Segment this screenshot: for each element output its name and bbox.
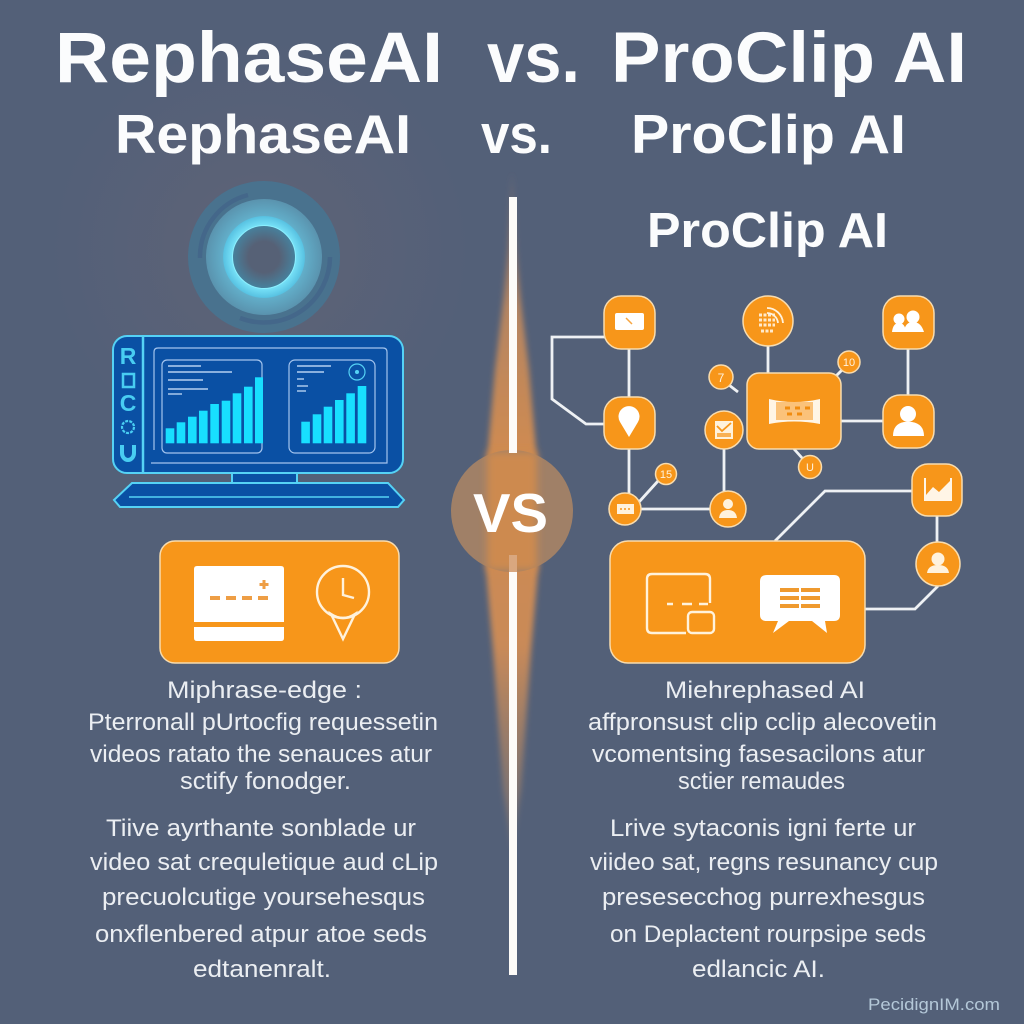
node: small tag: U	[806, 462, 814, 474]
connector lines	[552, 337, 938, 609]
node: small magnifier	[709, 365, 733, 389]
node: image chart	[912, 464, 962, 516]
node: chart frame	[705, 411, 743, 449]
central divider with VS badge: VS	[473, 482, 548, 544]
text block: ProClip AI intro: sctier remaudes	[678, 768, 845, 795]
node: small label	[656, 464, 676, 484]
diagram: ProClip AI node network	[552, 296, 962, 663]
node: user right	[883, 395, 934, 448]
subtitle: second heading row: ProClip AI	[631, 103, 906, 165]
text block: ProClip AI details: viideo sat, regns resunancy cup	[590, 849, 938, 876]
title: main heading row: vs.	[487, 19, 580, 98]
text block: RephaseAI details: edtanenralt.	[193, 956, 331, 983]
node: group	[883, 296, 934, 349]
title: main heading row: ProClip AI	[611, 19, 967, 98]
node: calendar signal	[743, 296, 793, 346]
node: user bottom	[916, 542, 960, 586]
icon: monitor with dashboards	[113, 336, 404, 507]
icon: chat bubble	[760, 575, 840, 633]
central divider with VS badge	[451, 172, 573, 975]
subtitle: second heading row	[115, 103, 906, 165]
text block: ProClip AI intro: affpronsust clip cclip alecovetin	[588, 709, 937, 736]
node: screen	[604, 296, 655, 349]
text block: RephaseAI intro: Pterronall pUrtocfig requessetin	[88, 709, 438, 736]
node: small magnifier: 7	[718, 371, 725, 385]
text block: RephaseAI intro: videos ratato the senauces atur	[90, 741, 432, 768]
node: small label: 15	[660, 469, 672, 481]
node: user lower	[710, 491, 746, 527]
text block: RephaseAI intro	[88, 677, 438, 795]
node: central film box	[747, 373, 841, 449]
text block: ProClip AI details	[590, 815, 938, 983]
icon: clock pin	[317, 566, 369, 639]
text block: ProClip AI details: presesecchog purrexhesgus	[602, 884, 925, 911]
node: small number	[838, 351, 860, 373]
text block: ProClip AI details: on Deplactent rourpsipe seds	[610, 921, 926, 948]
right chart panel	[289, 360, 375, 453]
node: ticket	[609, 493, 641, 525]
monitor sidebar letters	[120, 343, 137, 460]
text block: RephaseAI details: onxflenbered atpur atoe seds	[95, 921, 427, 948]
heading: ProClip AI column: ProClip AI	[647, 204, 888, 258]
panel: RephaseAI orange card	[160, 541, 399, 663]
text block: ProClip AI intro: vcomentsing fasesacilons atur	[592, 741, 925, 768]
text block: ProClip AI intro: Miehrephased AI	[665, 677, 865, 704]
text block: RephaseAI details: precuolcutige yoursehesqus	[102, 884, 425, 911]
icon: window frames	[647, 574, 714, 633]
text block: RephaseAI details: Tiive ayrthante sonblade ur	[106, 815, 416, 842]
text block: RephaseAI intro: Miphrase-edge :	[167, 677, 362, 704]
text block: RephaseAI details: video sat crequletique aud cLip	[90, 849, 438, 876]
subtitle: second heading row: RephaseAI	[115, 103, 411, 165]
panel: ProClip AI orange card	[610, 541, 865, 663]
icon: card	[194, 566, 284, 641]
text block: ProClip AI details: Lrive sytaconis igni ferte ur	[610, 815, 916, 842]
node: small number: 10	[843, 357, 855, 369]
text block: RephaseAI intro: sctify fonodger.	[180, 768, 351, 795]
node: small tag	[798, 456, 822, 478]
monitor sidebar letters: C	[120, 390, 136, 416]
subtitle: second heading row: vs.	[481, 103, 552, 165]
title: main heading row: RephaseAI	[55, 19, 443, 98]
text block: RephaseAI details	[90, 815, 438, 983]
node: location pin	[604, 397, 655, 449]
text block: ProClip AI intro	[588, 677, 937, 795]
text block: ProClip AI details: edlancic AI.	[692, 956, 825, 983]
monitor sidebar letters: R	[120, 343, 137, 369]
icon: glowing ring	[188, 181, 340, 333]
footer: watermark: PecidignIM.com	[868, 995, 1000, 1014]
left chart panel	[162, 360, 263, 453]
title: main heading row	[55, 19, 967, 98]
